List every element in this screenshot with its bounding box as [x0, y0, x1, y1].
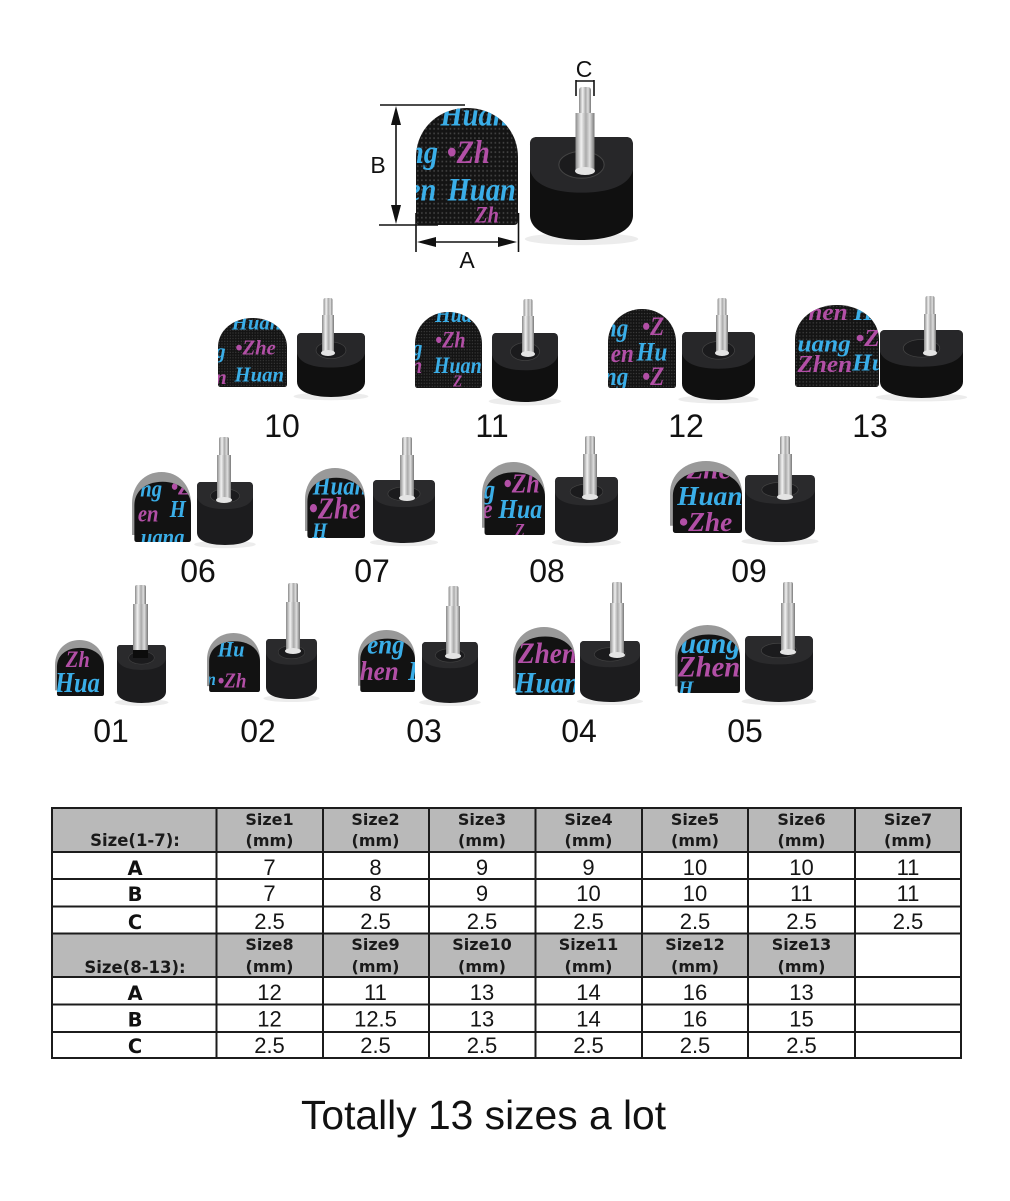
row B sizes 1-7: [128, 881, 919, 906]
row C sizes 1-7: 2.5: [360, 909, 391, 934]
header row sizes 1-7: (mm): [884, 831, 932, 850]
pin: [321, 298, 335, 356]
header row sizes 1-7: [52, 808, 961, 852]
label: 05: [727, 713, 763, 749]
dimension B: B: [370, 152, 386, 178]
row C sizes 8-13: 2.5: [360, 1033, 391, 1058]
tip: H: [169, 495, 187, 522]
tip: Hua: [497, 494, 542, 525]
pin: [399, 437, 415, 501]
row B sizes 1-7: 10: [576, 881, 601, 906]
pin: [923, 296, 937, 356]
row B sizes 8-13: 12: [257, 1006, 282, 1032]
tip: Huan: [231, 313, 281, 335]
size 06: [132, 437, 256, 589]
pin: [780, 582, 796, 655]
tip: g: [411, 335, 423, 361]
dimension A: A: [459, 247, 475, 273]
tip: •Zh: [218, 669, 247, 693]
tip: •Zh: [503, 468, 540, 499]
tip: Hua: [434, 302, 472, 327]
row C sizes 8-13: 2.5: [680, 1033, 710, 1058]
row C sizes 8-13: [128, 1033, 817, 1058]
header row sizes 1-7: Size5: [671, 810, 719, 829]
tip with script print: •Zh: [447, 134, 490, 170]
header row sizes 8-13: Size8: [245, 935, 294, 954]
row C sizes 8-13: 2.5: [254, 1033, 285, 1058]
label: 02: [240, 713, 276, 749]
tip: Z: [452, 373, 463, 391]
tip with script print: Huan: [447, 172, 516, 208]
row C sizes 1-7: 2.5: [467, 909, 497, 934]
tip: [305, 468, 365, 538]
dimension C: C: [576, 56, 592, 82]
heel: [552, 477, 621, 546]
header row sizes 1-7: (mm): [352, 831, 399, 850]
heel: [419, 642, 481, 706]
tip: H: [311, 518, 328, 543]
heel: [577, 641, 643, 705]
row B sizes 8-13: 15: [789, 1006, 814, 1032]
heel: [489, 333, 561, 405]
row B sizes 1-7: B: [128, 883, 142, 906]
row A sizes 8-13: 13: [470, 980, 494, 1005]
tip: •Zh: [855, 325, 894, 352]
tip: •Z: [171, 473, 191, 500]
tip: uang: [798, 331, 851, 358]
pin: [582, 436, 598, 500]
row A sizes 8-13: 11: [364, 980, 387, 1005]
header row sizes 1-7: (mm): [458, 831, 506, 850]
heel: [115, 645, 168, 706]
row C sizes 1-7: [128, 909, 923, 934]
header row sizes 8-13: Size(8-13):: [84, 958, 186, 977]
size 10: [214, 298, 368, 444]
tip: •Zh: [435, 328, 466, 353]
label: 13: [852, 408, 888, 444]
header row sizes 8-13: (mm): [778, 957, 825, 976]
row B sizes 1-7: 11: [897, 881, 919, 906]
pin: [216, 437, 232, 503]
tip: Huan: [312, 472, 367, 501]
pin: [777, 436, 793, 500]
label: 06: [180, 553, 216, 589]
size 07: [305, 437, 438, 589]
header row sizes 8-13: Size11: [559, 935, 618, 954]
row C sizes 1-7: 2.5: [786, 909, 817, 934]
tip: [54, 640, 104, 698]
header row sizes 8-13: Size12: [665, 935, 725, 954]
tip: H: [677, 677, 695, 699]
heel: [370, 480, 438, 546]
header row sizes 1-7: (mm): [246, 831, 293, 850]
row A sizes 1-7: 9: [582, 855, 595, 880]
header row sizes 1-7: (mm): [565, 831, 612, 850]
label: 09: [731, 553, 767, 589]
header row sizes 8-13: (mm): [671, 957, 719, 976]
tip: n: [207, 669, 216, 689]
row C sizes 8-13: 2.5: [467, 1033, 497, 1058]
label: 10: [264, 408, 300, 444]
label: 04: [561, 713, 597, 749]
header row sizes 8-13: Size9: [351, 935, 400, 954]
label: 08: [529, 553, 565, 589]
dimension C: [576, 56, 594, 96]
tip: Huan: [234, 364, 284, 386]
row A sizes 8-13: A: [127, 982, 143, 1005]
row C sizes 8-13: C: [128, 1035, 142, 1058]
header row sizes 1-7: (mm): [778, 831, 825, 850]
tip with script print: Huan: [440, 97, 509, 133]
row C sizes 8-13: 2.5: [786, 1033, 817, 1058]
tip with script print: Zh: [474, 201, 499, 228]
label: 11: [475, 408, 509, 444]
row B sizes 8-13: 14: [576, 1006, 601, 1032]
row A sizes 1-7: A: [127, 857, 143, 880]
tip: Zhen: [677, 651, 740, 684]
row A sizes 1-7: 11: [897, 855, 919, 880]
metal pin: [575, 87, 595, 175]
label: 12: [668, 408, 704, 444]
tip: [604, 309, 676, 391]
row B sizes 1-7: 11: [790, 881, 813, 906]
header row sizes 1-7: Size2: [351, 810, 400, 829]
tip: ng: [604, 314, 628, 343]
pin: [133, 585, 148, 658]
tip: [132, 472, 191, 542]
row C sizes 1-7: 2.5: [573, 909, 604, 934]
header row sizes 8-13: (mm): [246, 957, 293, 976]
row B sizes 1-7: 7: [263, 881, 276, 906]
tip: [358, 630, 415, 692]
heel: [742, 636, 816, 705]
tip: [207, 633, 260, 693]
heel: [678, 332, 759, 403]
pin: [521, 299, 535, 357]
tip: Huan: [676, 481, 743, 511]
tip: Huan: [433, 353, 482, 378]
tip with script print: en: [408, 172, 436, 208]
heel: [194, 482, 256, 548]
tip: Zhe: [686, 454, 731, 484]
row A sizes 8-13: 12: [257, 980, 282, 1005]
tip: H: [407, 656, 429, 686]
header row sizes 8-13: (mm): [565, 957, 612, 976]
row A sizes 1-7: 10: [789, 855, 814, 880]
tip: Huan: [513, 666, 579, 700]
row A sizes 1-7: 9: [476, 855, 488, 880]
header row sizes 1-7: (mm): [671, 831, 719, 850]
size 11: [411, 299, 561, 444]
dimension B: [370, 105, 465, 225]
header row sizes 1-7: Size3: [458, 810, 506, 829]
tip: n: [215, 367, 227, 389]
row B sizes 8-13: 16: [683, 1006, 707, 1032]
heel: [876, 330, 967, 401]
pin: [445, 586, 461, 659]
tip: hen: [360, 656, 399, 686]
row C sizes 1-7: 2.5: [254, 909, 285, 934]
row A sizes 8-13: 14: [576, 980, 601, 1005]
tip: e: [482, 494, 493, 525]
tip: uang: [141, 523, 184, 550]
row A sizes 1-7: [127, 855, 919, 880]
tip: Hu: [851, 350, 886, 377]
tip: n: [411, 353, 422, 378]
size 08: [482, 436, 621, 589]
tip: g: [214, 341, 226, 363]
header row sizes 8-13: (mm): [458, 957, 506, 976]
header row sizes 1-7: Size6: [777, 810, 826, 829]
header row sizes 1-7: Size4: [564, 810, 613, 829]
size 03: [358, 586, 481, 749]
pin: [715, 298, 729, 356]
tip: hen: [808, 299, 848, 326]
tip: g: [482, 474, 495, 505]
size 09: [670, 436, 818, 589]
header row sizes 8-13: Size10: [452, 935, 512, 954]
row B sizes 1-7: 10: [683, 881, 707, 906]
tip: Zhen: [797, 351, 852, 378]
header row sizes 8-13: Size13: [772, 935, 831, 954]
pin: [285, 583, 301, 654]
tip: Hu: [217, 637, 245, 662]
tip: •Zhe: [679, 507, 732, 537]
tip: eng: [367, 630, 405, 660]
row B sizes 8-13: 12.5: [354, 1006, 397, 1032]
row B sizes 8-13: 13: [470, 1006, 494, 1032]
row B sizes 8-13: [128, 1006, 814, 1032]
size 12: [604, 298, 759, 444]
tip: [415, 312, 482, 388]
header row sizes 1-7: Size(1-7):: [90, 831, 180, 850]
header row sizes 1-7: Size7: [884, 810, 932, 829]
row A sizes 1-7: 8: [369, 855, 382, 880]
dimension A: [416, 213, 518, 273]
row A sizes 8-13: 16: [683, 980, 707, 1005]
tip: [675, 625, 741, 699]
tip with script print: ng: [408, 134, 438, 170]
row A sizes 1-7: 10: [683, 855, 707, 880]
size 02: [207, 583, 320, 749]
tip: Hua: [54, 668, 100, 698]
size 05: [675, 582, 816, 749]
tip: [513, 627, 575, 695]
row B sizes 1-7: 9: [476, 881, 488, 906]
label: 03: [406, 713, 442, 749]
tip: [482, 462, 545, 541]
tip: ng: [604, 362, 628, 391]
tip: Zh: [65, 646, 90, 672]
heel: [742, 475, 818, 545]
row A sizes 8-13: [127, 980, 814, 1005]
tip with script print: [416, 108, 518, 225]
heel: [294, 333, 368, 400]
header row sizes 8-13: (mm): [352, 957, 399, 976]
caption: Totally 13 sizes a lot: [301, 1092, 667, 1138]
header row sizes 8-13: [52, 934, 855, 977]
tip: [670, 461, 742, 533]
tip: •Zhe: [235, 338, 276, 360]
row A sizes 1-7: 7: [263, 855, 276, 880]
tip: uang: [680, 627, 741, 660]
tip: [218, 318, 287, 387]
row A sizes 8-13: 13: [789, 980, 814, 1005]
heel cap: [525, 137, 638, 245]
diagram: dimensions A B C: [370, 56, 638, 273]
tip: •Z: [642, 362, 664, 391]
tip: Z: [514, 519, 525, 541]
row B sizes 1-7: 8: [369, 881, 382, 906]
tip: Hu: [636, 338, 667, 367]
header row sizes 1-7: Size1: [245, 810, 294, 829]
row C sizes 8-13: 2.5: [573, 1033, 604, 1058]
row C sizes 1-7: C: [128, 911, 142, 934]
tip: •Z: [642, 313, 664, 342]
pin: [609, 582, 625, 658]
heel: [263, 639, 320, 702]
row C sizes 1-7: 2.5: [680, 909, 710, 934]
label: 07: [354, 553, 390, 589]
row C sizes 1-7: 2.5: [893, 909, 923, 934]
size 01: [54, 585, 168, 749]
size table: [52, 808, 961, 1058]
tip: •Zhe: [309, 492, 361, 526]
tip: Zhen: [517, 637, 577, 670]
tip: en: [611, 339, 634, 368]
tip: ng: [140, 475, 162, 502]
row B sizes 8-13: B: [128, 1008, 142, 1032]
tip: Hu: [853, 299, 888, 326]
tip: [795, 305, 879, 387]
size 04: [513, 582, 643, 749]
size 13: [795, 296, 967, 444]
label: 01: [93, 713, 129, 749]
tip: en: [138, 500, 159, 527]
